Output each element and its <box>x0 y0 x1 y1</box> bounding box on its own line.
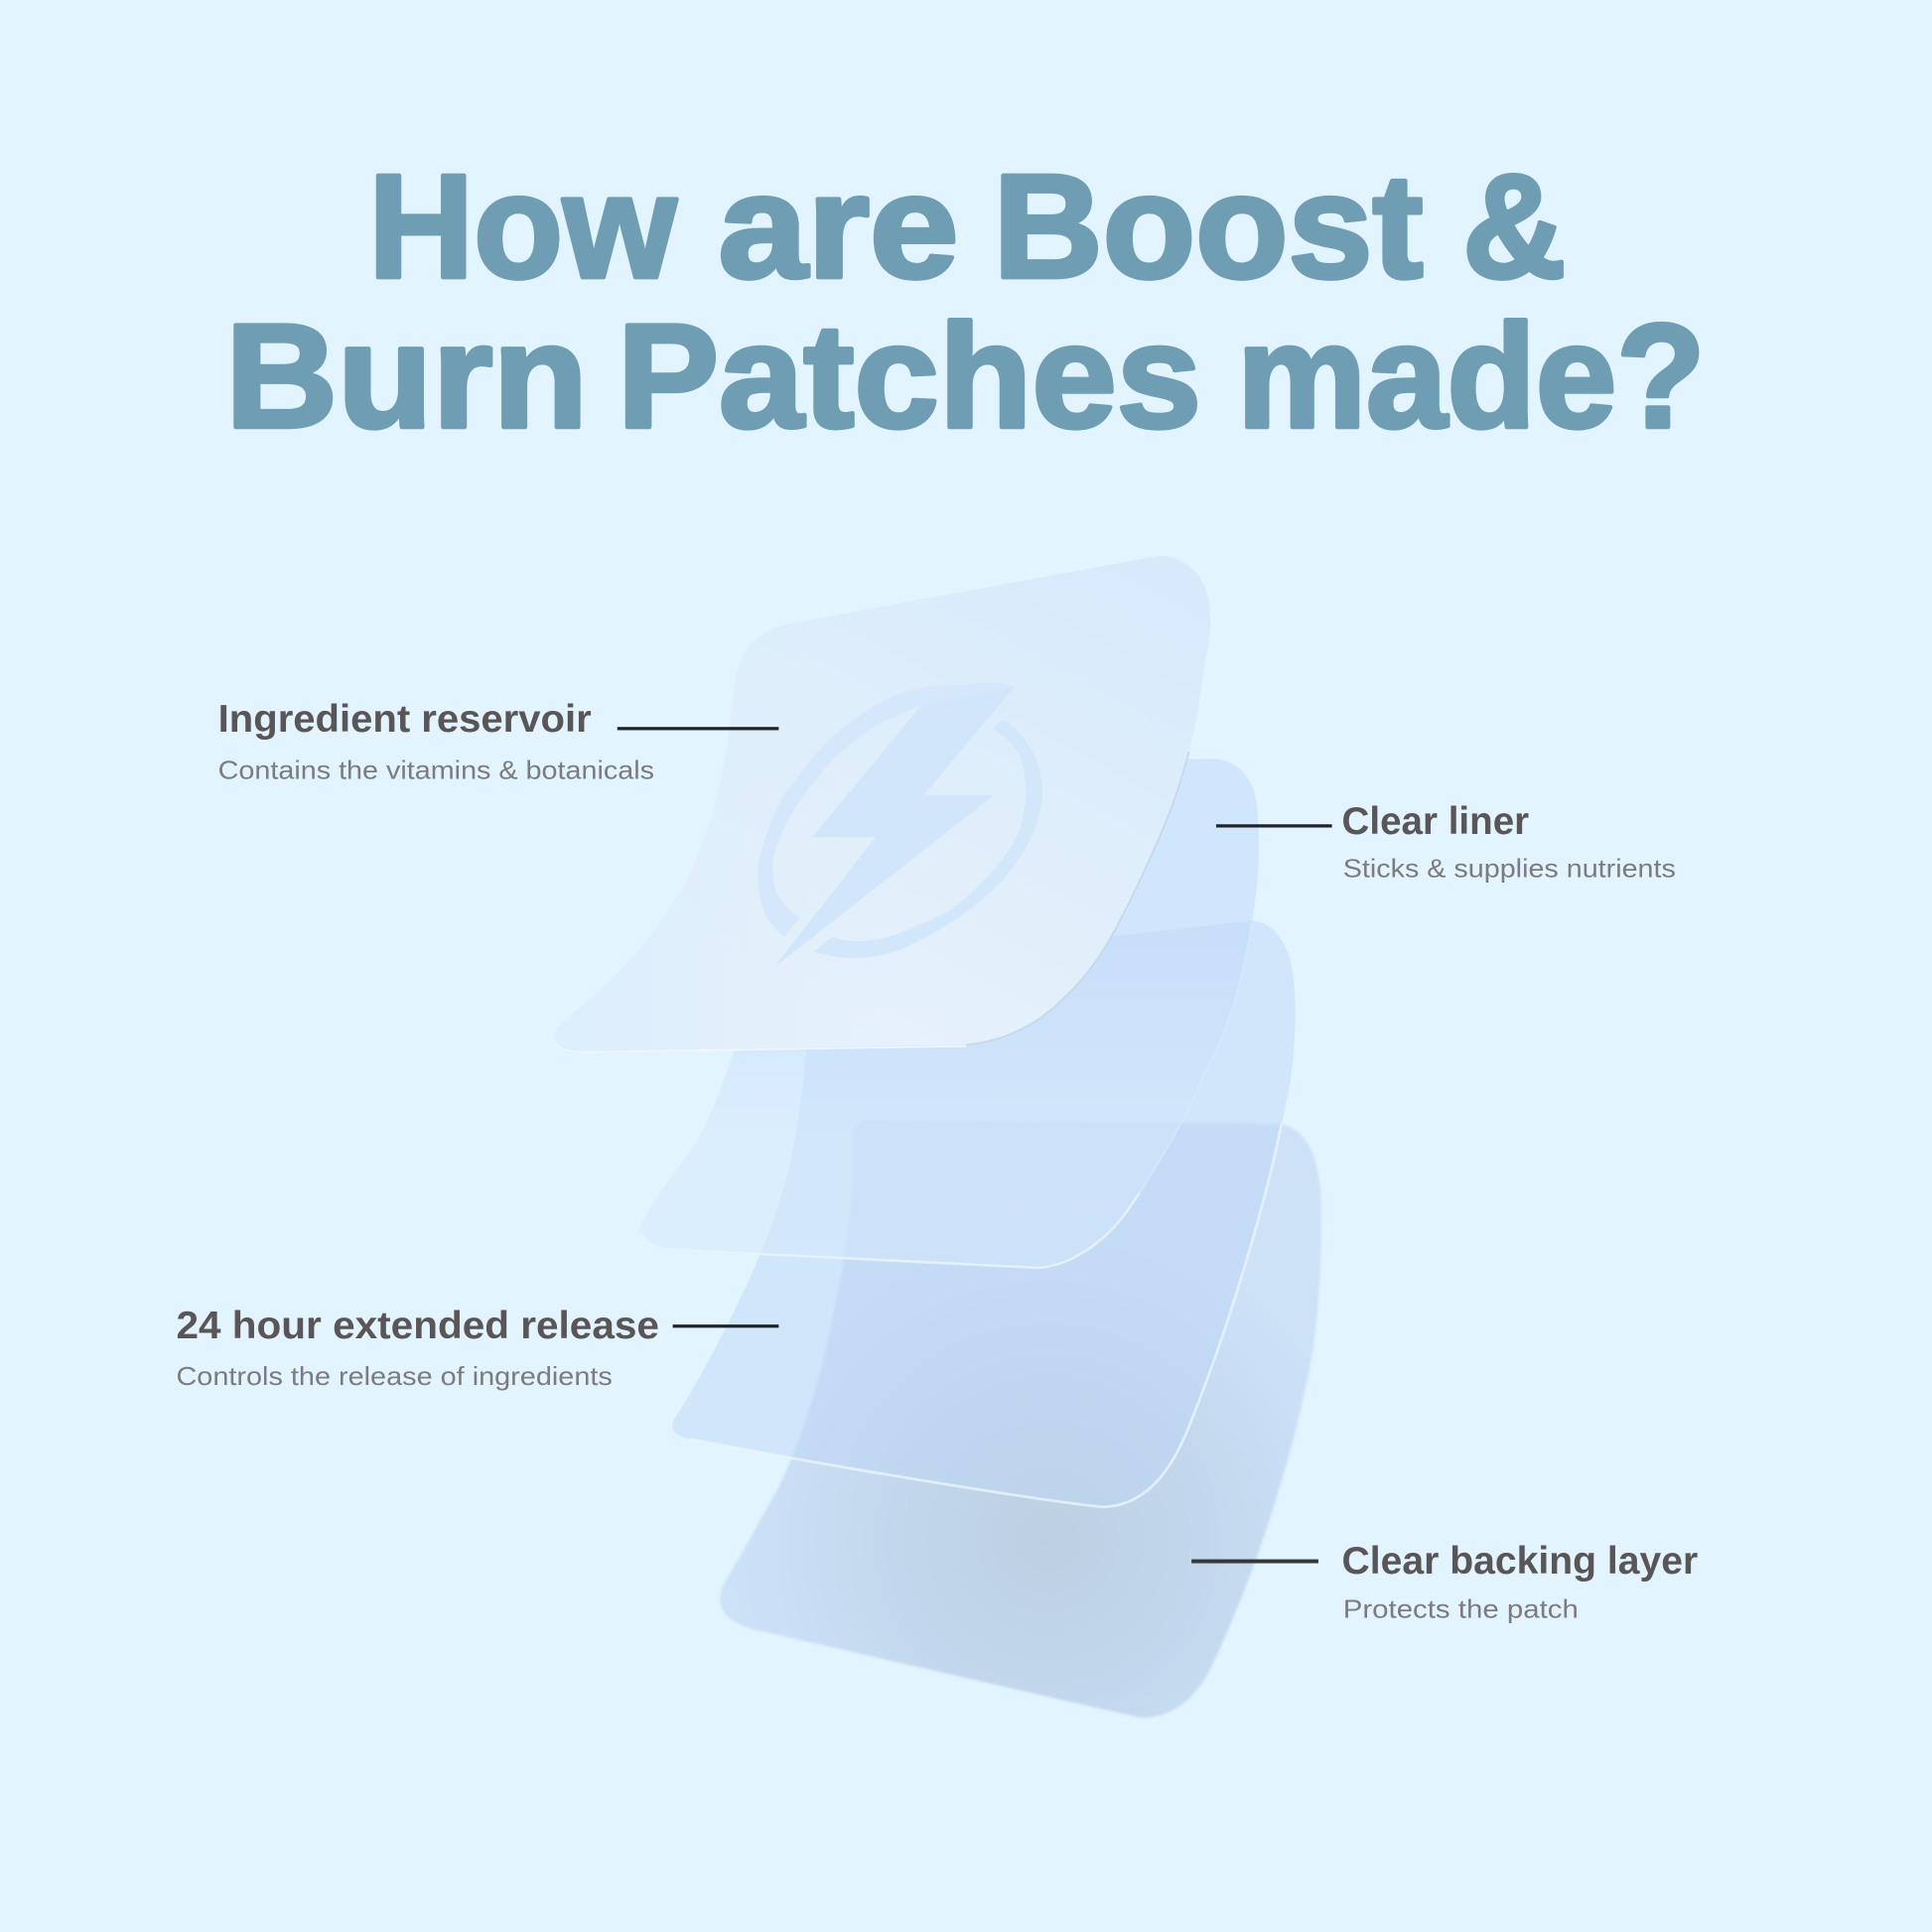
layer: clear liner <box>639 759 1259 1268</box>
title: Burn <box>225 293 588 459</box>
layer: 24 hour extended release <box>672 920 1296 1507</box>
callout: clear backing layer: Protects the patch <box>1343 1596 1579 1624</box>
callout: ingredient reservoir <box>218 698 778 784</box>
callout: ingredient reservoir: Contains the vitamins & botanicals <box>218 757 654 784</box>
exploded patch layers <box>554 556 1321 1718</box>
callout: 24 hour extended release: 24 hour extended release <box>176 1305 659 1347</box>
callout: clear liner <box>1216 800 1676 884</box>
layer: clear backing <box>720 1120 1321 1718</box>
layer: ingredient reservoir <box>554 556 1210 1052</box>
callout: clear backing layer <box>1191 1540 1698 1624</box>
callout: clear liner: Sticks & supplies nutrients <box>1343 856 1676 884</box>
callout: clear backing layer: Clear backing layer <box>1342 1540 1698 1583</box>
title: Patches <box>618 293 1201 459</box>
title <box>225 143 1706 459</box>
callout: 24 hour extended release <box>176 1305 778 1391</box>
callout: ingredient reservoir: Ingredient reservoir <box>218 698 592 741</box>
callout: clear liner: Clear liner <box>1342 800 1529 843</box>
title: Boost <box>993 143 1423 309</box>
title: made? <box>1237 293 1706 459</box>
title: How <box>368 143 677 309</box>
title: are <box>719 143 959 309</box>
icon: lightning bolt in ring <box>758 683 1042 967</box>
callout: 24 hour extended release: Controls the release of ingredients <box>176 1363 613 1391</box>
title: & <box>1462 143 1566 309</box>
